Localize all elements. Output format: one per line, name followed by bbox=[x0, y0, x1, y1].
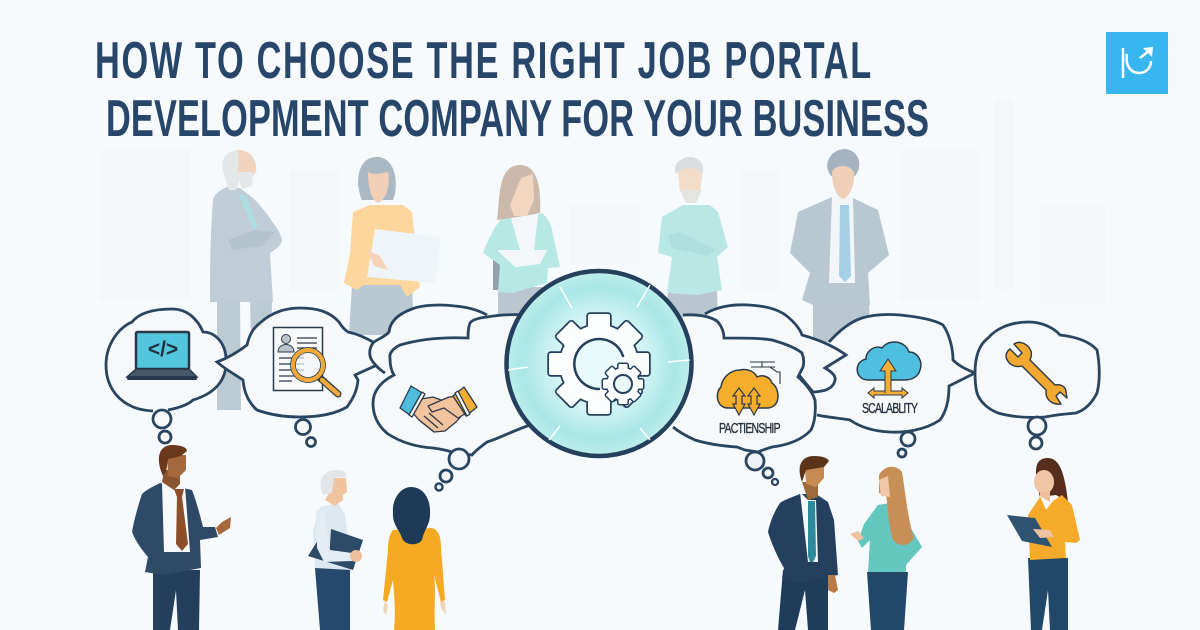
thought dot bbox=[746, 452, 764, 470]
faded person: man with crossed arms bbox=[658, 157, 728, 325]
bubble 2: resume search bbox=[217, 308, 377, 446]
title: DEVELOPMENT COMPANY FOR YOUR BUSINESS bbox=[106, 90, 929, 148]
thought dot small bbox=[763, 468, 773, 478]
title bbox=[95, 32, 929, 148]
logo badge bbox=[1106, 32, 1168, 94]
icon: blue cloud with arrows bbox=[857, 342, 921, 398]
person: woman in orange dress bbox=[383, 487, 446, 630]
title: HOW TO CHOOSE THE RIGHT JOB PORTAL bbox=[95, 32, 871, 90]
thought dot bbox=[296, 420, 310, 434]
thought dot small bbox=[1030, 437, 1042, 449]
person: woman with clipboard bbox=[1007, 458, 1080, 630]
icon: large gear bbox=[549, 314, 649, 414]
person: man in suit with teal tie bbox=[768, 456, 838, 630]
thought dot bbox=[901, 432, 915, 446]
thought dot small bbox=[440, 470, 452, 482]
label: scalability: SCALABLITY bbox=[862, 399, 918, 416]
thought dot smallest bbox=[436, 484, 442, 490]
bubble 4: back lobe bbox=[705, 305, 846, 392]
thought dot bbox=[153, 410, 171, 428]
icon: small gear bbox=[603, 364, 643, 404]
thought dot bbox=[1028, 417, 1046, 435]
faded person: woman in teal bbox=[483, 165, 560, 318]
thought dot small bbox=[159, 431, 171, 443]
icon: resume with magnifier bbox=[274, 328, 338, 394]
faint skyline bbox=[100, 100, 1105, 305]
thought dot bbox=[449, 449, 469, 469]
bubble 5: scalability bbox=[817, 314, 975, 457]
icon: handshake bbox=[400, 386, 477, 432]
thought dot small bbox=[898, 449, 906, 457]
thought dot smallest bbox=[772, 479, 778, 485]
faded person: woman with paper bbox=[344, 157, 441, 335]
label: partnership: PACTIENSHIP bbox=[719, 419, 781, 436]
bubble 6: wrench bbox=[975, 322, 1099, 449]
light rays bbox=[508, 285, 690, 440]
faded person: older man bbox=[210, 150, 282, 410]
faded person: man in suit bbox=[790, 149, 889, 342]
bubble 1: laptop bbox=[106, 309, 226, 443]
icon: wrench bbox=[1006, 342, 1067, 404]
thought dot small bbox=[306, 438, 316, 446]
icon: orange cloud bbox=[717, 362, 780, 415]
icon: laptop: </> bbox=[148, 338, 178, 361]
person: woman with long hair in teal bbox=[850, 467, 922, 630]
bubble 4: cloud partnership bbox=[673, 315, 815, 485]
person: man in navy suit with brown tie bbox=[132, 445, 231, 630]
bubble 3: partnership back lobe bbox=[370, 305, 487, 373]
bubble 3: partnership bbox=[373, 315, 530, 490]
central gear circle bbox=[506, 271, 692, 456]
person: older man with folder bbox=[308, 470, 363, 630]
